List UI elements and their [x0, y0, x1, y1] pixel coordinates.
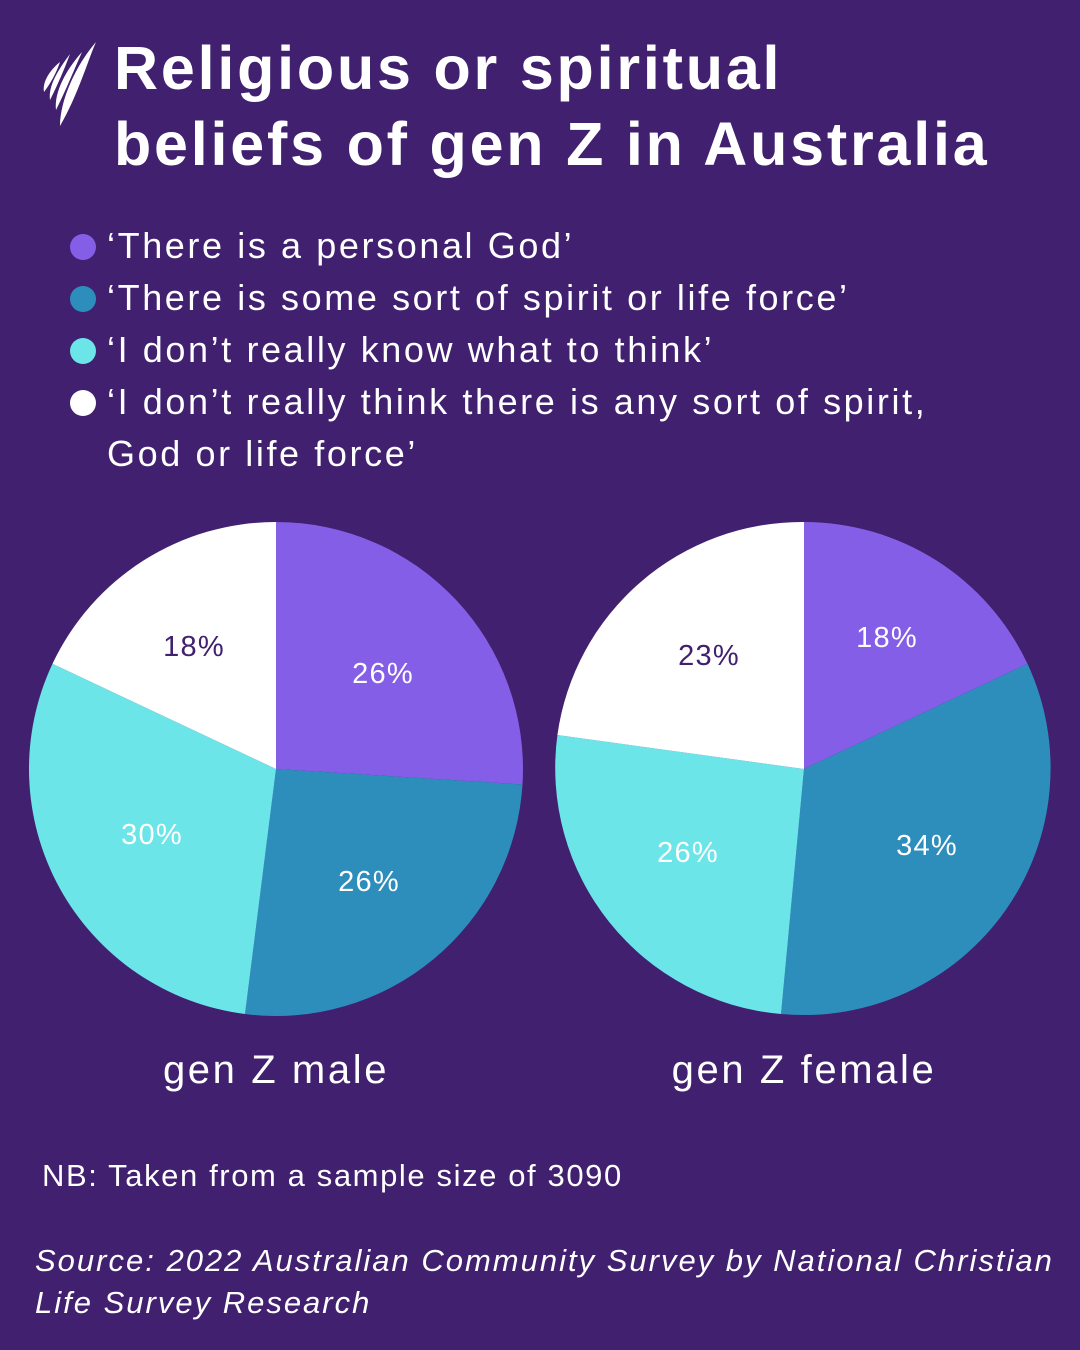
caption: female: gen Z female — [672, 1048, 936, 1092]
legend: ‘There is some sort of spirit or life force’ — [107, 277, 850, 318]
pie: gen Z female: 34% — [896, 830, 958, 862]
legend: God or life force’ — [107, 433, 418, 474]
legend: ‘I don’t really know what to think’ — [107, 329, 714, 370]
pie: gen Z male — [29, 522, 523, 1016]
pie: gen Z female — [555, 522, 1051, 1015]
source: Source: 2022 Australian Community Survey by National Christian — [35, 1243, 1054, 1278]
pie: gen Z female: 23% — [678, 640, 740, 672]
icon: SBS logo — [44, 42, 96, 126]
pie: gen Z female: 26% — [657, 837, 719, 869]
legend — [70, 225, 927, 474]
pie: gen Z female: 18% — [856, 622, 918, 654]
source: Life Survey Research — [35, 1285, 371, 1320]
pie: gen Z male: 26% — [338, 866, 400, 898]
pie: gen Z male: 30% — [121, 819, 183, 851]
pie: gen Z male: 26% — [352, 658, 414, 690]
title: Religious or spiritual — [114, 34, 782, 102]
caption: male: gen Z male — [163, 1048, 389, 1092]
pie: gen Z male: 18% — [163, 631, 225, 663]
legend: ‘There is a personal God’ — [107, 225, 574, 266]
title — [114, 34, 989, 178]
title: beliefs of gen Z in Australia — [114, 110, 989, 178]
note: NB: Taken from a sample size of 3090 — [42, 1158, 623, 1193]
source — [35, 1243, 1054, 1320]
legend: ‘I don’t really think there is any sort of spirit, — [107, 381, 927, 422]
